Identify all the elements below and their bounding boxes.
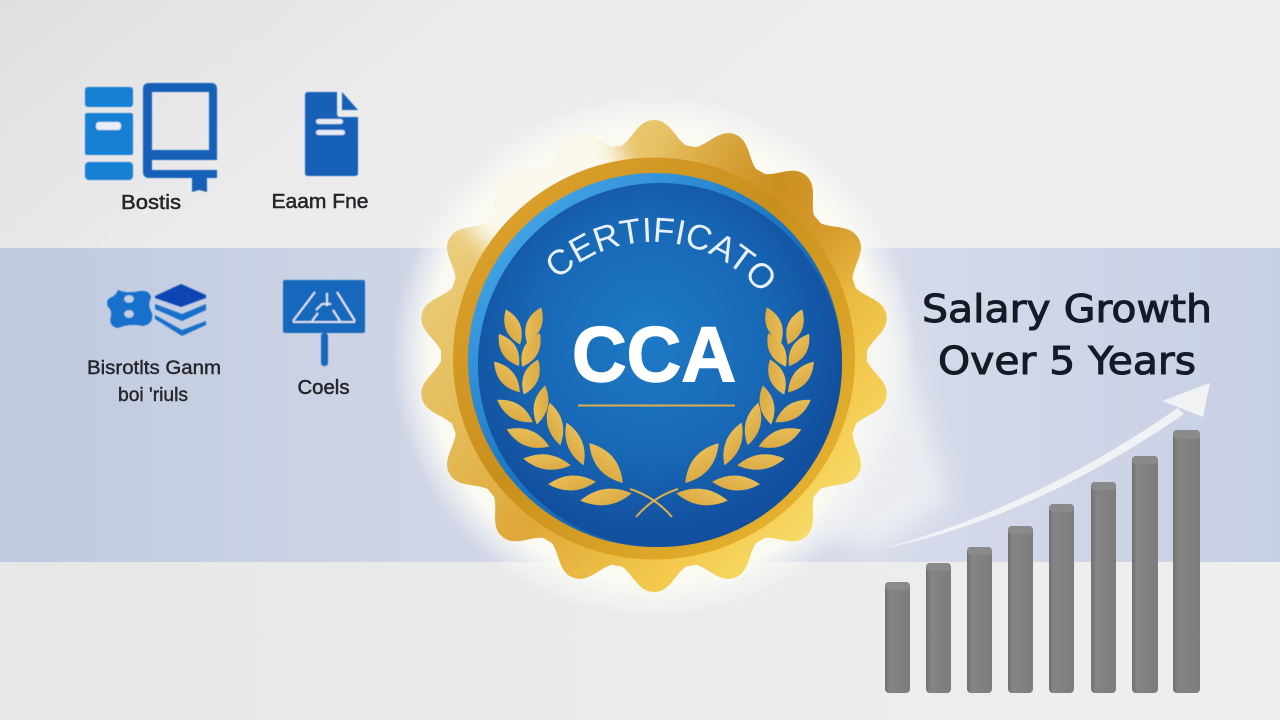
laurel left	[488, 305, 672, 517]
label: Coels: Coels	[298, 377, 350, 399]
badge underline	[578, 404, 735, 406]
chart title: Salary Growth	[922, 287, 1212, 331]
growth arrow	[880, 383, 1210, 549]
badge blue disc	[478, 183, 842, 547]
label: Bostis: Bostis	[121, 192, 181, 214]
label: bai riuls: boi 'riuls	[118, 385, 188, 406]
laurel right	[636, 305, 820, 517]
badge blue rim	[468, 173, 842, 547]
badge gold ring	[453, 158, 855, 560]
bar chart	[885, 430, 1200, 693]
chart title	[922, 287, 1212, 383]
chart title: Over 5 Years	[938, 339, 1196, 383]
badge arc text: CERTIFICATO	[548, 218, 774, 288]
bar 7	[1132, 456, 1158, 693]
icon: books	[85, 83, 217, 192]
bar 1	[885, 582, 910, 693]
icon: document	[305, 92, 358, 176]
badge scalloped gold edge	[421, 120, 887, 592]
bar 5	[1049, 504, 1074, 693]
icon: gear and layers	[107, 284, 206, 336]
label: Eaam Fne: Eaam Fne	[272, 191, 368, 213]
bar 2	[926, 563, 951, 693]
label: Bisrotlts Ganm: Bisrotlts Ganm	[87, 358, 221, 379]
glow behind badge	[392, 94, 950, 618]
bar 4	[1008, 526, 1033, 693]
bar 3	[967, 547, 992, 693]
bar 8	[1173, 430, 1200, 693]
bar 6	[1091, 482, 1116, 693]
icon: sign with triangle	[283, 280, 365, 366]
badge title: CCA	[572, 310, 736, 398]
certificate badge	[421, 120, 887, 592]
